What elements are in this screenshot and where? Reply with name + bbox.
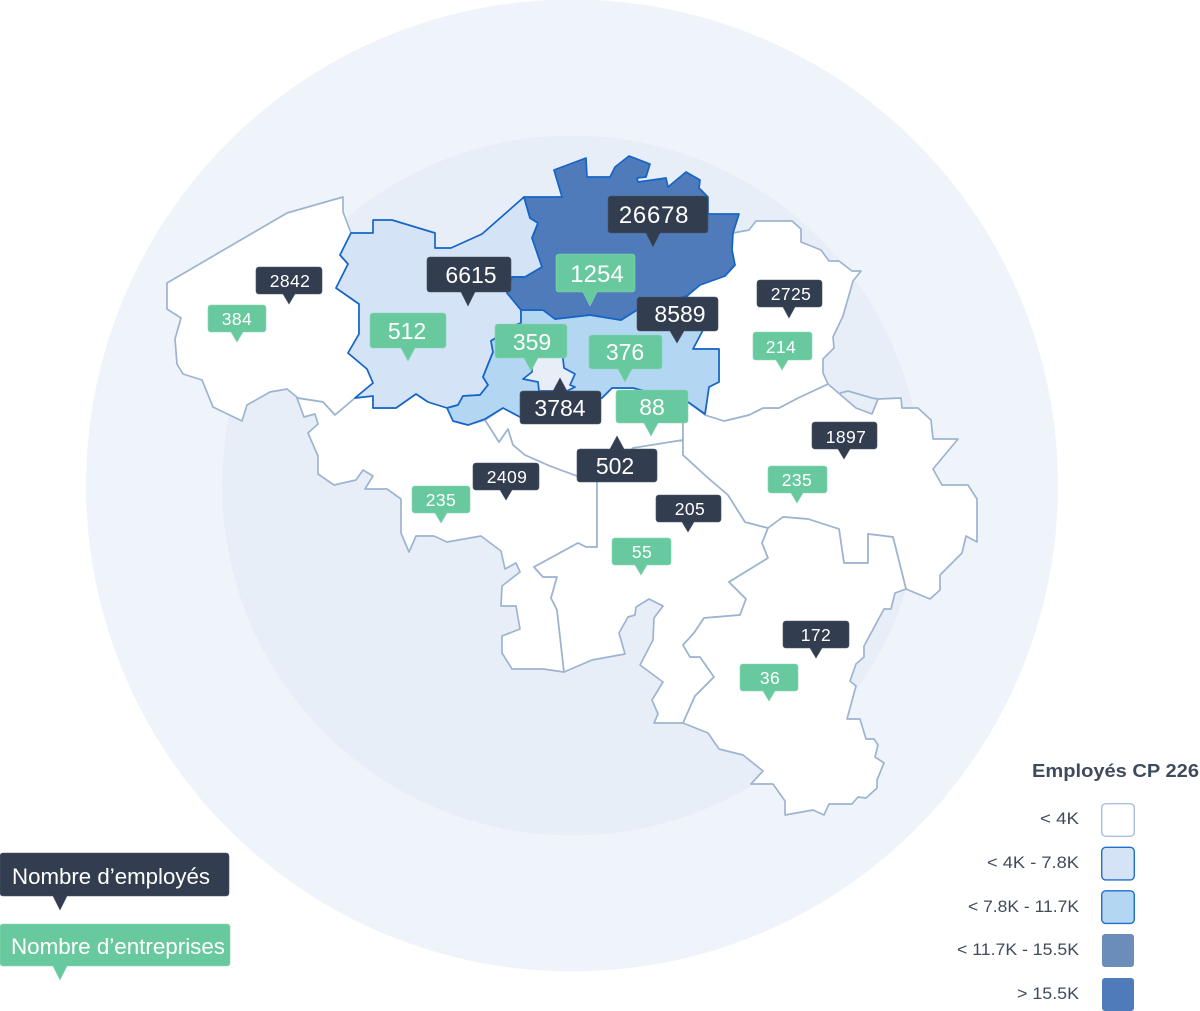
label: 205 employees	[656, 495, 721, 532]
label: 1897 employees: 1897	[826, 427, 866, 447]
key: number of employees: Nombre d’employés	[12, 864, 210, 889]
province: Limburg	[687, 221, 861, 421]
label: 235 companies east	[768, 466, 827, 503]
label: 214 companies	[753, 332, 812, 370]
label: 359 companies: 359	[513, 329, 551, 355]
label: 88 companies	[616, 390, 688, 436]
label: 36 companies	[740, 664, 798, 701]
label: 2409 employees: 2409	[487, 467, 527, 487]
province: Flemish Brabant	[447, 296, 719, 425]
label: 2409 employees	[473, 463, 539, 500]
label: 36 companies: 36	[760, 668, 780, 688]
label: 8589 employees	[637, 297, 718, 343]
label: 8589 employees: 8589	[654, 301, 706, 327]
province: Liège	[683, 384, 977, 599]
legend row: 4K to 7.8K: < 4K - 7.8K	[987, 853, 1080, 872]
province: Hainaut	[297, 394, 597, 672]
legend row: 11.7K to 15.5K: < 11.7K - 15.5K	[957, 940, 1080, 959]
legend row: under 4K	[1040, 804, 1134, 836]
label: 502 employees	[577, 436, 657, 482]
legend: employees CP 226	[957, 761, 1199, 1011]
label: 205 employees: 205	[675, 499, 705, 519]
label: 384 companies	[208, 305, 266, 342]
label: 88 companies: 88	[639, 394, 665, 420]
label: 6615 employees: 6615	[445, 262, 497, 288]
legend row: under 4K: < 4K	[1040, 809, 1080, 828]
label: 1254 companies	[556, 254, 635, 306]
key: number of employees	[0, 853, 229, 910]
label: 235 companies west	[412, 486, 470, 523]
province: Voeren	[840, 391, 878, 399]
key: number of companies: Nombre d’entreprises	[11, 934, 225, 959]
label: 384 companies: 384	[222, 309, 252, 329]
label: 3784 employees: 3784	[534, 395, 586, 421]
label: 26678 employees	[608, 196, 708, 247]
label: 2842 employees: 2842	[270, 271, 310, 291]
legend row: 7.8K to 11.7K: < 7.8K - 11.7K	[968, 897, 1080, 916]
map of Belgium	[167, 156, 977, 815]
label: 502 employees: 502	[596, 453, 634, 479]
label: 512 companies	[370, 313, 446, 361]
label: 3784 employees	[520, 378, 601, 424]
province: Luxembourg	[683, 517, 906, 815]
province: West Flanders	[167, 197, 373, 421]
label: 6615 employees	[427, 257, 511, 306]
label: 55 companies	[612, 538, 671, 575]
legend row: 7.8K to 11.7K	[968, 891, 1134, 923]
label: 214 companies: 214	[766, 337, 796, 357]
province: East Flanders	[336, 197, 542, 408]
label: 26678 employees: 26678	[619, 202, 689, 229]
label: 376 companies	[589, 335, 662, 382]
key: number of companies	[0, 924, 230, 980]
outer background circle	[86, 0, 1058, 972]
legend row: over 15.5K: > 15.5K	[1017, 984, 1080, 1003]
region: Brussels	[523, 350, 575, 391]
province: Namur	[534, 440, 768, 723]
label: 359 companies	[495, 324, 567, 371]
label: 512 companies: 512	[388, 318, 426, 344]
label: 1254 companies: 1254	[570, 261, 624, 288]
label: 55 companies: 55	[632, 542, 652, 562]
label: 2725 employees	[757, 280, 822, 318]
label: 376 companies: 376	[606, 339, 644, 365]
label: 2725 employees: 2725	[771, 284, 811, 304]
legend title: Employés CP 226	[1032, 761, 1199, 781]
label: 1897 employees	[812, 422, 877, 459]
label: 235 companies east: 235	[782, 470, 812, 490]
legend row: over 15.5K	[1017, 978, 1134, 1011]
label: 2842 employees	[256, 267, 322, 304]
label: 172 employees	[783, 621, 849, 658]
label: 172 employees: 172	[801, 625, 831, 645]
province: Walloon Brabant	[485, 388, 688, 480]
legend row: 11.7K to 15.5K	[957, 934, 1134, 967]
legend row: 4K to 7.8K	[987, 847, 1134, 880]
label: 235 companies west: 235	[426, 490, 456, 510]
inner background circle	[222, 136, 922, 836]
province: Antwerp	[507, 156, 739, 320]
